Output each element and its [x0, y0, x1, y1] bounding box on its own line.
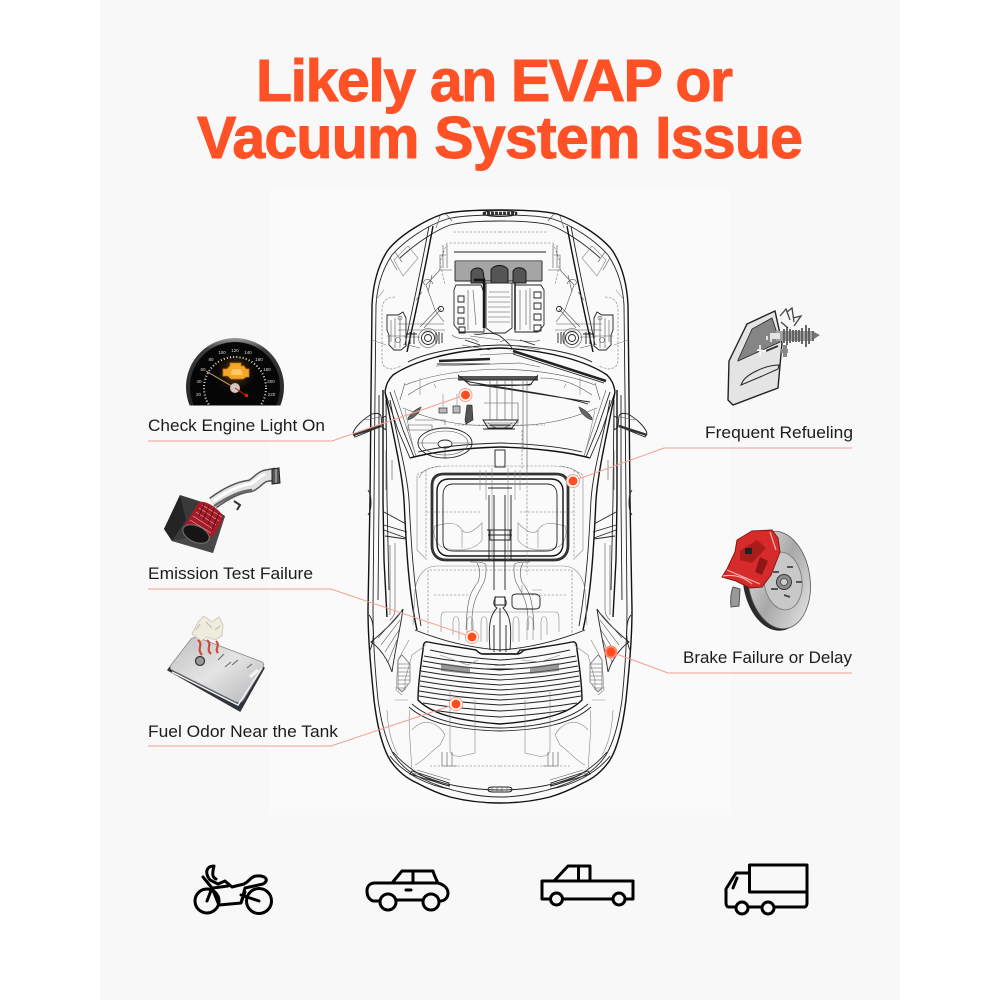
callout line: emission test failure: [148, 589, 472, 637]
icon: speedometer with check engine light: 100: [218, 350, 226, 355]
callout line: check engine light: [148, 395, 465, 441]
icon: speedometer with check engine light: 220: [268, 392, 276, 397]
icon: speedometer with check engine light: 20: [196, 392, 201, 397]
marker: brake failure: [604, 646, 618, 658]
callout line: fuel odor: [148, 704, 456, 746]
icon: motorcycle: [195, 866, 272, 914]
icon: speedometer with check engine light: 40: [196, 379, 202, 384]
icon: speedometer with check engine light: 60: [200, 367, 206, 372]
icon: speedometer with check engine light: [186, 338, 284, 406]
car line drawing, top-down x-ray view: [353, 210, 647, 803]
icon: speedometer with check engine light: 120: [231, 348, 239, 353]
label: fuel odor near the tank: Fuel Odor Near the Tank: [148, 722, 339, 741]
icon: speedometer with check engine light: 160: [255, 357, 263, 362]
icon: pickup truck: [542, 866, 633, 905]
icon: fuel tank with fumes: [168, 616, 264, 711]
callout line: frequent refueling: [573, 448, 852, 481]
marker: emission test failure: [466, 630, 478, 644]
marker: frequent refueling: [566, 474, 580, 488]
icon: car: [367, 871, 448, 910]
label: emission test failure: Emission Test Failure: [148, 564, 313, 583]
icon: brake disc and red caliper: [722, 527, 817, 635]
label: check engine light on: Check Engine Light On: [148, 416, 325, 435]
icon: speedometer with check engine light: 80: [208, 357, 214, 362]
icon: speedometer with check engine light: 180: [263, 367, 271, 372]
icon: air intake: [164, 468, 280, 553]
label: brake failure or delay: Brake Failure or Delay: [683, 648, 852, 667]
callout line: brake failure: [611, 652, 852, 673]
icon: speedometer with check engine light: 140: [244, 350, 252, 355]
marker: fuel odor: [450, 698, 462, 710]
title: [197, 48, 803, 171]
title: Likely an EVAP or: [256, 48, 733, 114]
icon: box truck: [726, 865, 807, 914]
marker: check engine light: [459, 388, 472, 402]
icon: car door with rattling bolt: [728, 308, 820, 405]
page background panel: [100, 0, 900, 1000]
icon: speedometer with check engine light: 200: [267, 379, 275, 384]
label: frequent refueling: Frequent Refueling: [705, 423, 853, 442]
title: Vacuum System Issue: [197, 105, 803, 171]
